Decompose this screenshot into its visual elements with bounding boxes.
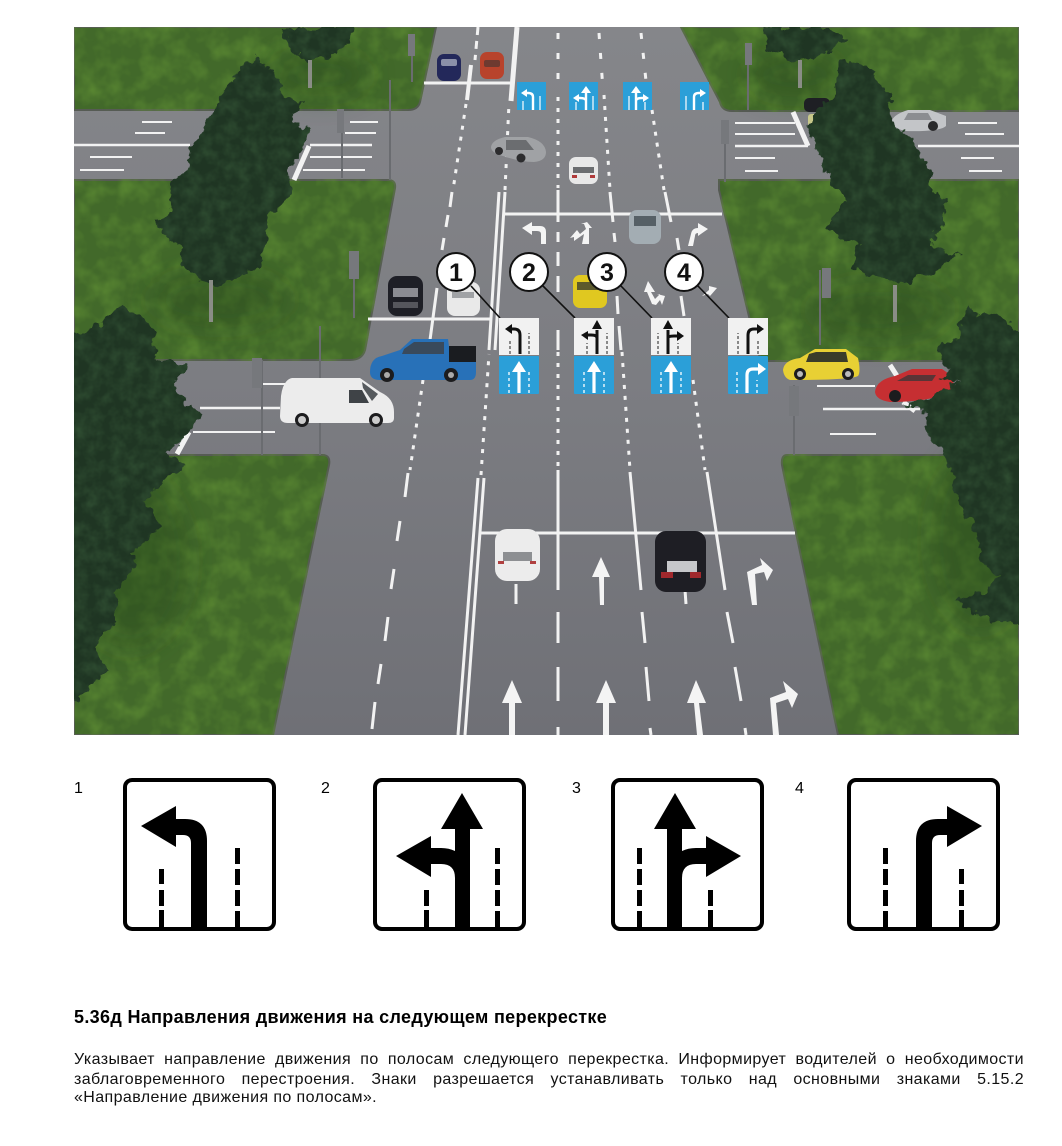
- car: blue pickup: [370, 339, 476, 382]
- callout 1: [437, 253, 475, 291]
- car: yellow taxi: [573, 275, 607, 308]
- car: silver sedan far right: [892, 110, 946, 131]
- sign 4: right turn: [847, 778, 1000, 931]
- lane line B: [610, 192, 651, 735]
- car: yellow hatchback: [783, 349, 860, 380]
- callout 4: 4: [677, 259, 691, 287]
- sign 3: straight or right: [611, 778, 764, 931]
- car: red sedan: [480, 52, 504, 79]
- centre short line under white car: [516, 584, 686, 604]
- label 3: 3: [572, 780, 581, 797]
- road surface: [74, 27, 1019, 735]
- callout 3: [588, 253, 626, 291]
- pavement arrows: [502, 222, 798, 735]
- lane line A: [556, 190, 560, 735]
- car: white car top: [569, 157, 598, 184]
- grass areas: [74, 27, 1019, 735]
- tree shadows on grass: [70, 53, 1030, 650]
- callout 1: 1: [449, 259, 463, 287]
- car: navy sedan: [437, 54, 461, 81]
- blue lane signs: [499, 356, 768, 394]
- car: grey-blue car: [629, 210, 661, 244]
- road markings: [74, 27, 1019, 735]
- callout 2: [510, 253, 548, 291]
- car: silver sedan top: [491, 137, 546, 162]
- car: red sedan right: [875, 369, 955, 402]
- callout 2: 2: [522, 259, 536, 287]
- tree: top centre left: [281, 27, 351, 60]
- car: dark car behind right tree: [804, 98, 830, 126]
- tree: top centre right: [763, 27, 847, 60]
- label 1: 1: [74, 780, 83, 797]
- tree: bottom left: [60, 304, 201, 700]
- label 4: 4: [795, 780, 804, 797]
- sign 1: left turn: [123, 778, 276, 931]
- callout 3: 3: [600, 259, 614, 287]
- tree: bottom right: [907, 310, 1027, 627]
- heading: 5.36д Направления движения на следующем перекрестке: [74, 1007, 607, 1027]
- numbered callouts: [437, 253, 703, 291]
- tree: top right main: [807, 60, 960, 284]
- trees: [60, 27, 1027, 700]
- cars: [280, 52, 955, 592]
- description text: [74, 1051, 1024, 1106]
- lane line C: [665, 192, 746, 735]
- centre double line: [458, 478, 484, 735]
- description text: Указывает направление движения по полосам следующего перекрестка. Информирует водителей о необходимости: [74, 1051, 1024, 1068]
- callout 4: [665, 253, 703, 291]
- car: white hatchback bottom: [495, 529, 540, 581]
- car: white sedan: [447, 282, 480, 316]
- white signs: [499, 318, 768, 355]
- description text: «Направление движения по полосам».: [74, 1089, 377, 1106]
- traffic lights: [252, 34, 831, 455]
- stop lines on side roads: [177, 112, 915, 454]
- left carriageway lane line: [475, 27, 478, 60]
- top blue signs row: [517, 82, 709, 110]
- tree: top left main: [154, 59, 311, 284]
- sign 2: straight or left: [373, 778, 526, 931]
- car: white van: [280, 378, 394, 427]
- scene: aerial illustration of intersection with road signs: [74, 27, 1019, 735]
- label 2: 2: [321, 780, 330, 797]
- car: black sedan: [388, 276, 423, 316]
- description text: заблаговременного перестроения. Знаки разрешается устанавливать только над основными знаками 5.15.2: [74, 1071, 1024, 1088]
- road signs: white next-junction signs and blue lane signs: [499, 318, 768, 394]
- tree trunks: [211, 60, 895, 322]
- car: black SUV bottom: [655, 531, 706, 592]
- callout lines: [471, 285, 729, 318]
- side road lane lines: [74, 145, 1019, 409]
